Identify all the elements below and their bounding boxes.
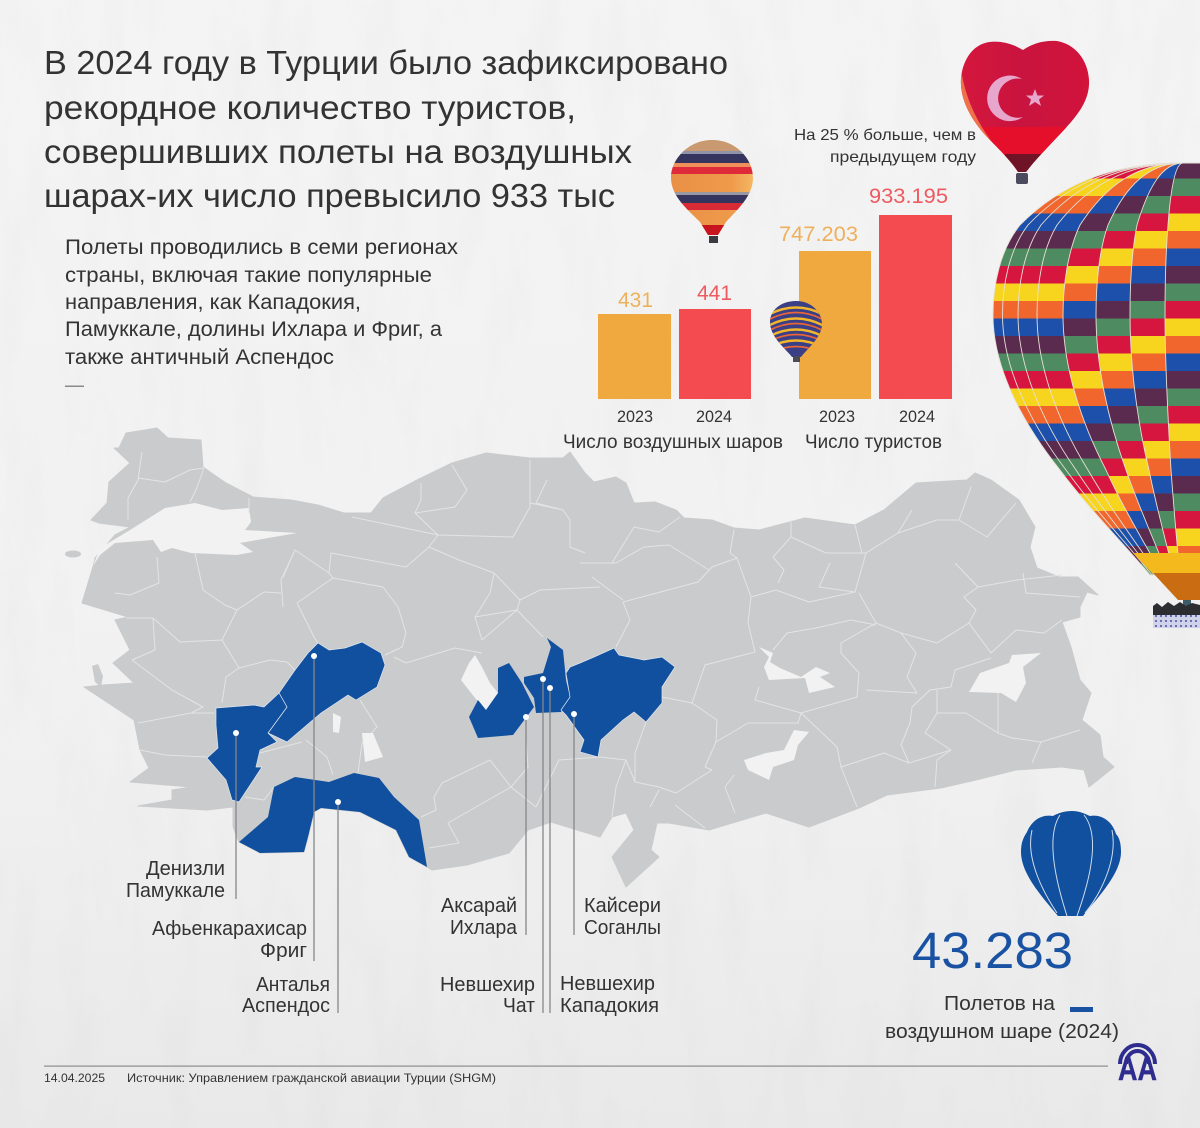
callout: 25 percent more: [794, 127, 976, 166]
label: Afyonkarahisar: Фриг: [260, 940, 307, 962]
stat: flights in 2024: 43.283: [912, 922, 1073, 979]
intro paragraph: страны, включая такие популярные: [65, 264, 432, 287]
map: Gokceada island: [65, 550, 81, 558]
bar chart: number of tourists: Число туристов: [805, 432, 942, 453]
label: Aksaray: Ихлара: [450, 917, 518, 939]
bar chart: number of balloons: Число воздушных шаров: [563, 432, 783, 453]
bar chart: number of balloons: 431: [618, 289, 653, 312]
icon: heart balloon with Turkish flag: [960, 40, 1090, 184]
balloon: yellow band: [1133, 553, 1200, 573]
label: Denizli: [126, 858, 225, 902]
intro paragraph: направления, как Кападокия,: [65, 291, 361, 314]
title: совершивших полеты на воздушных: [44, 133, 633, 170]
label: Afyonkarahisar: Афьенкарахисар: [152, 918, 307, 940]
logo: Anadolu Agency: AA: [1118, 1050, 1157, 1087]
footer: [44, 1066, 1108, 1085]
label: Nevsehir Cappadocia: Невшехир: [560, 973, 655, 995]
footer: Источник: Управлением гражданской авиации Турции (SHGM): [127, 1071, 496, 1085]
province: Nevsehir: [524, 638, 570, 713]
bar chart: number of tourists: 2024: [899, 408, 935, 426]
province: Afyonkarahisar: [268, 642, 385, 742]
label: Nevsehir Cappadocia: [560, 973, 659, 1017]
bar chart: number of balloons: 2023: [617, 408, 653, 426]
bar chart: number of balloons: 441: [697, 282, 732, 305]
label: Kayseri: Соганлы: [584, 917, 661, 939]
title: [44, 44, 728, 214]
icon: blue balloon: [1021, 811, 1121, 916]
label: Antalya: Аспендос: [242, 995, 330, 1017]
map: lakes: [333, 647, 1041, 780]
footer: 14.04.2025: [44, 1071, 105, 1085]
intro paragraph: Памуккале, долины Ихлара и Фриг, а: [65, 318, 442, 341]
map: highlighted provinces: [207, 638, 675, 867]
label: Denizli: Денизли: [146, 858, 225, 880]
bar chart: number of tourists: 933.195: [869, 185, 948, 208]
label: Nevsehir Cat: Невшехир: [440, 974, 535, 996]
label: Antalya: [242, 974, 330, 1017]
label: Nevsehir Cat: Чат: [503, 995, 535, 1017]
stat: flights in 2024: [885, 922, 1119, 1043]
callout: 25 percent more: На 25 % больше, чем в: [794, 127, 976, 144]
label: Antalya: Анталья: [256, 974, 330, 996]
stat: flights in 2024: Полетов на: [944, 993, 1056, 1015]
map: Aegean island: [92, 664, 103, 687]
province: Kayseri: [561, 648, 675, 757]
province: Antalya: [239, 773, 427, 867]
map: Sea of Marmara: [93, 503, 297, 566]
intro paragraph: Полеты проводились в семи регионах: [65, 236, 459, 259]
bar chart: number of tourists: 747.203: [779, 223, 858, 246]
title: рекордное количество туристов,: [44, 89, 576, 126]
region labels: [126, 858, 661, 1017]
balloon: basket: [1153, 615, 1200, 628]
balloon: rope: [1183, 600, 1191, 606]
province: Denizli: [207, 693, 287, 802]
label: Nevsehir Cat: [440, 974, 535, 1017]
balloon: passengers: [1153, 602, 1200, 615]
province: Aksaray: [469, 663, 534, 738]
bar chart: number of tourists: 2023: [819, 408, 855, 426]
map: province borders: [115, 452, 1080, 848]
map: location dots: [233, 653, 577, 805]
label: Kayseri: Кайсери: [584, 895, 661, 917]
label: Afyonkarahisar: [152, 918, 307, 962]
label: Aksaray: Аксарай: [441, 895, 517, 917]
balloon: skirt: [1153, 573, 1200, 600]
label: Aksaray: [441, 895, 518, 939]
map: country silhouette: [82, 428, 1114, 887]
label: Nevsehir Cappadocia: Кападокия: [560, 995, 659, 1017]
icon: large multicolour balloon: [993, 163, 1200, 628]
map of Turkey: [65, 428, 1114, 1013]
label: Denizli: Памуккале: [126, 880, 225, 902]
stat: flights in 2024: воздушном шаре (2024): [885, 1021, 1119, 1043]
bar chart: number of balloons: 2024: [696, 408, 732, 426]
icon: small zigzag balloon: [770, 301, 822, 362]
intro paragraph: также античный Аспендос: [65, 346, 334, 369]
bar chart: number of tourists: [779, 185, 952, 453]
icon: orange striped balloon: [671, 140, 753, 243]
title: В 2024 году в Турции было зафиксировано: [44, 44, 728, 81]
label: Kayseri: [584, 895, 661, 939]
bar chart: number of balloons: [563, 282, 783, 453]
title: шарах-их число превысило 933 тыс: [44, 177, 615, 214]
map: leader lines: [236, 656, 574, 1013]
callout: 25 percent more: предыдущем году: [830, 149, 976, 166]
intro paragraph: [65, 236, 459, 387]
